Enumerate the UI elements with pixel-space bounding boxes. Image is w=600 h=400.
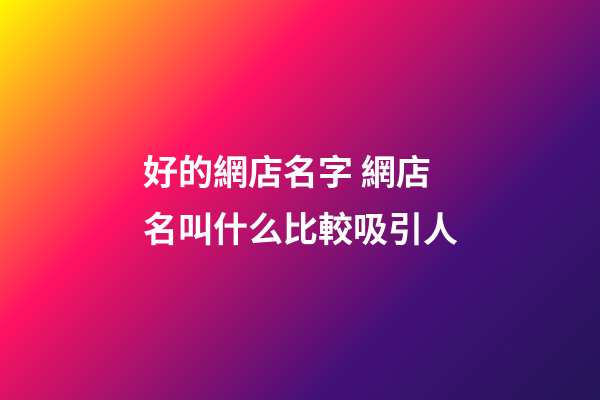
title line 2: 名叫什么比較吸引人 <box>143 211 458 250</box>
title <box>143 154 458 250</box>
title line 1: 好的網店名字 網店 <box>143 154 431 193</box>
